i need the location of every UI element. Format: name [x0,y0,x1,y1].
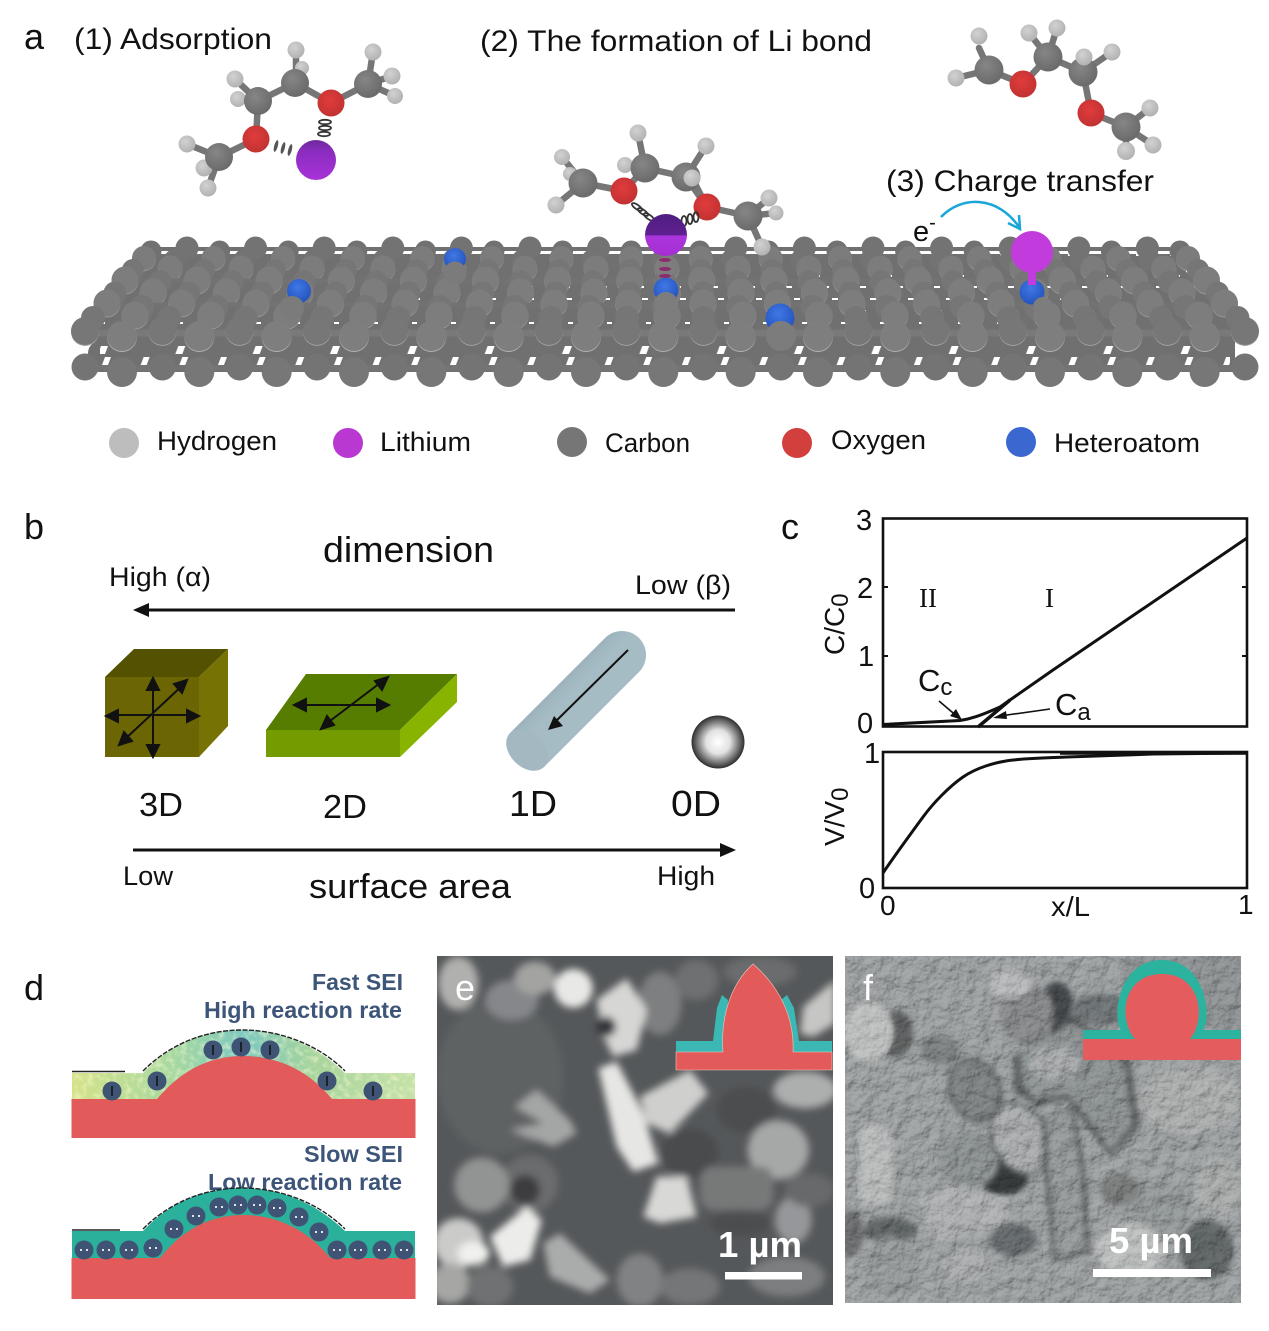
x axis labels [880,889,1254,922]
label: Ca with arrow: a [1077,699,1091,726]
text: fast SEI [204,969,403,1023]
region labels: I [1045,583,1054,613]
panel letter b: b [24,506,44,547]
text: fast SEI: Fast SEI [312,969,403,995]
heading: step 1 adsorption: (1) Adsorption [74,23,272,56]
label: high surface area: High [657,861,715,891]
dimension labels: 0D [671,783,721,824]
panel f: SEM image with slow SEI morphology [837,956,1243,1303]
panel a: lithium adsorption on doped carbon [24,16,1248,458]
dimension labels: 2D [323,788,367,825]
y tick labels [856,505,874,740]
panel c: concentration and velocity profiles [781,505,1254,922]
region labels: II [919,583,937,613]
heading: surface area: surface area [309,868,511,906]
legend: atom types [109,425,1200,458]
lower layer [85,346,1248,372]
heading: step 2 Li bond formation: (2) The formation of Li bond [480,25,872,58]
legend: atom types: Carbon [605,428,690,458]
y tick labels: 1 [858,641,874,673]
y axis title: 0 [827,593,854,607]
carbon lattice sheet [85,248,1248,372]
panel letter a: a [24,16,45,57]
y tick labels [859,738,880,905]
y tick labels: 0 [857,708,873,740]
heteroatoms embedded in lattice [280,248,796,351]
schematic: slow SEI layer [72,1188,416,1299]
text: slow SEI: Slow SEI [304,1141,403,1167]
molecule 3: free solvent molecule [948,20,1162,160]
dimension labels [139,783,721,825]
y axis title: C/C [819,607,850,655]
chart: velocity profile [819,738,1254,922]
label: Cc with arrow: c [940,674,952,701]
x axis labels: 0 [880,890,896,921]
SEM micrograph f [837,956,1243,1303]
icon: 1D rod [498,631,646,779]
region labels [919,583,1054,613]
heading: dimension: dimension [323,529,494,570]
scale bar 1 µm [720,1232,802,1280]
electron label: e [913,216,929,248]
y axis title: 0 [827,788,854,801]
icon: 0D sphere [692,716,744,768]
x axis labels: x/L [1051,891,1090,922]
panel e: SEM image with fast SEI morphology [430,956,837,1307]
scale bar 1 µm: 1 µm [718,1224,802,1265]
SEM micrograph e [430,956,837,1307]
heading: step 3 charge transfer: (3) Charge transfer [886,165,1154,198]
text: fast SEI: High reaction rate [204,997,402,1023]
scale bar 5 µm [1093,1220,1211,1277]
panel letter d: d [24,967,44,1008]
y tick labels: 1 [864,738,880,770]
molecule 2: Li bond on heteroatom [548,124,784,316]
icon: 3D cube [105,649,228,757]
molecule 1: adsorption with lithium [178,42,403,196]
arrow: surface area axis [133,843,736,857]
chart: concentration profile [819,505,1247,740]
scale bar 5 µm: 5 µm [1109,1220,1193,1261]
legend: atom types: Hydrogen [157,426,277,456]
label: low beta: Low (β) [635,570,731,600]
arrow: electron transfer [941,202,1020,229]
dimension labels: 3D [139,786,183,823]
dimension labels: 1D [509,783,557,824]
panel letter f: f [863,967,874,1008]
lithium atom with bond [1011,231,1053,285]
legend: atom types: Oxygen [831,425,926,455]
label: Ca with arrow [993,687,1091,726]
upper layer rows, back to front [85,248,1248,337]
panel b: dimension versus surface area [24,506,744,906]
x axis labels: 1 [1238,889,1254,920]
icon: 2D sheet [266,674,457,757]
electron label: - [929,212,936,234]
inset: slow SEI schematic after growth [1083,960,1241,1060]
y tick labels: 3 [856,505,872,537]
arrow: dimension axis [133,603,735,617]
heteroatom [1020,280,1044,304]
inset: fast SEI schematic after growth [676,964,832,1070]
label: Cc with arrow [918,663,962,720]
y tick labels: 2 [857,573,873,605]
curve: velocity [883,753,1247,873]
schematic: fast SEI layer [72,1030,416,1138]
label: high alpha: High (α) [109,562,211,592]
y axis title: V/V [819,801,850,846]
label: low surface area: Low [123,861,174,891]
label: Cc with arrow: C [918,663,940,698]
charge transfer: electron arrow and lithium on heteroatom [913,202,1053,317]
text: slow SEI [208,1141,403,1195]
y tick labels: 0 [859,873,875,905]
panel letter c: c [781,506,799,547]
text: slow SEI: Low reaction rate [208,1169,402,1195]
curve: anion and cation concentration [883,538,1247,724]
panel letter e: e [455,967,475,1008]
legend: atom types: Lithium [380,427,471,457]
label: Ca with arrow: C [1055,687,1077,722]
legend: atom types: Heteroatom [1054,428,1200,458]
panel d: SEI schematics [24,967,416,1299]
